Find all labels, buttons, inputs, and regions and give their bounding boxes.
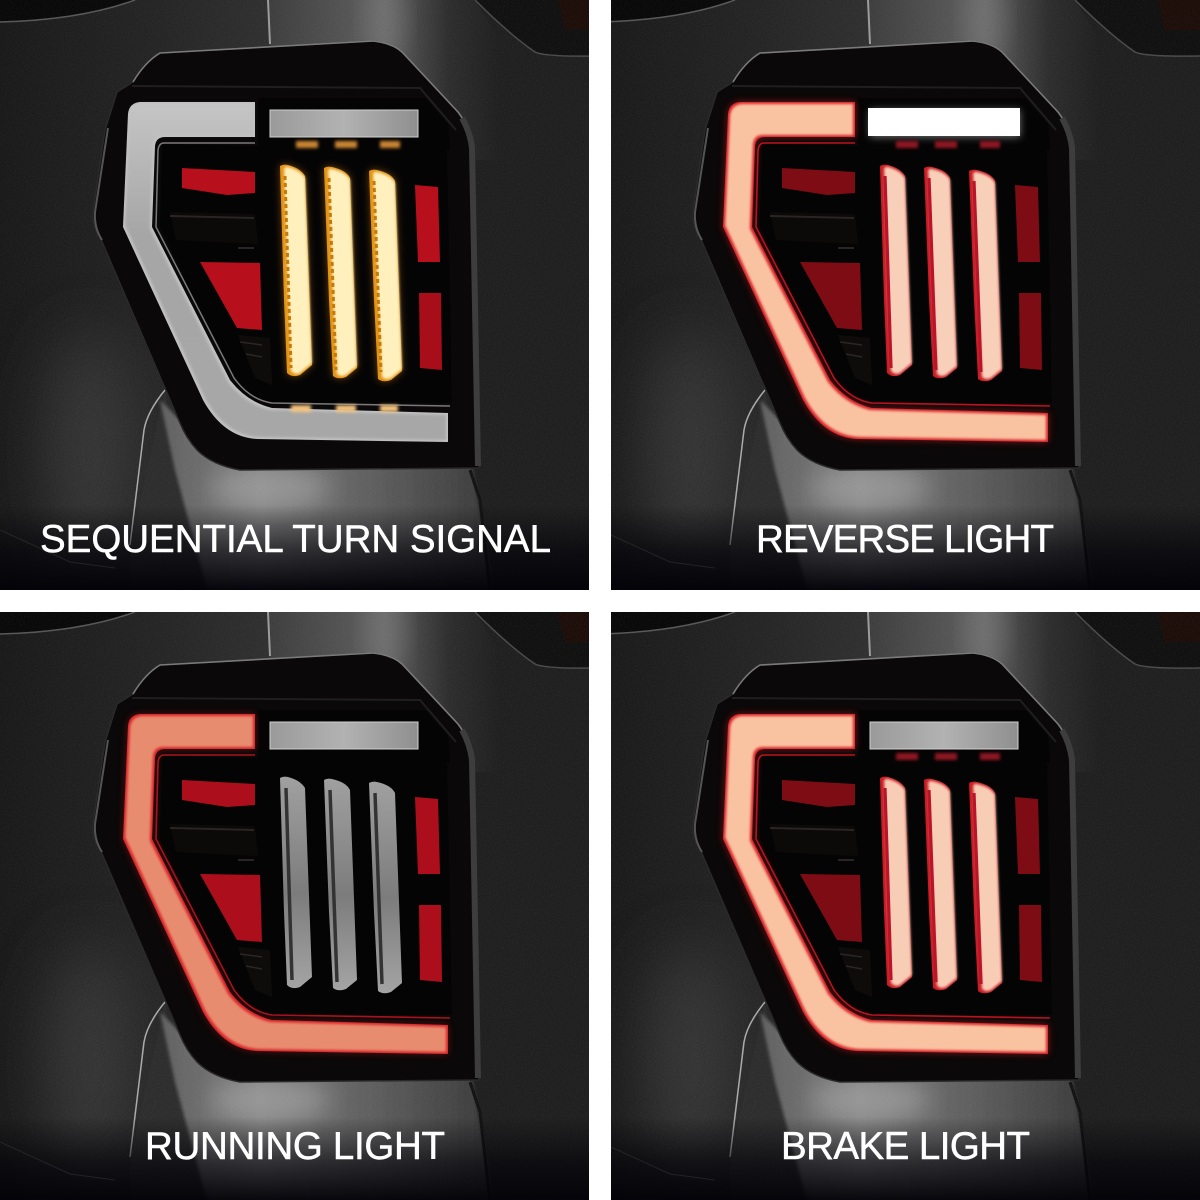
red reflections on the trim xyxy=(896,753,1000,760)
label: RUNNING LIGHT xyxy=(145,1125,445,1168)
bars: lit red xyxy=(880,165,1004,381)
label: BRAKE LIGHT xyxy=(781,1125,1030,1168)
red reflections on the trim xyxy=(896,141,1000,148)
panel: brake light xyxy=(600,587,1200,1200)
bars: unlit grey xyxy=(280,777,402,993)
bars: lit red xyxy=(880,777,1004,993)
red reflectors xyxy=(182,168,442,370)
tail lamp housing xyxy=(93,41,479,470)
panel: running light xyxy=(0,587,600,1200)
tail lamp housing xyxy=(693,653,1079,1082)
tube light: lit peach and red xyxy=(723,714,1050,1054)
red reflectors xyxy=(782,168,1042,370)
label: SEQUENTIAL TURN SIGNAL xyxy=(40,518,551,561)
tail lamp housing xyxy=(93,653,479,1082)
tube light: lit peach and red xyxy=(723,102,1050,442)
reverse lens: lit white xyxy=(868,108,1020,137)
amber reflections on the trim xyxy=(291,141,400,412)
turn signal bars: amber lit xyxy=(280,165,404,381)
reverse lens: off xyxy=(270,110,418,137)
reverse lens: off xyxy=(870,722,1018,749)
panel: sequential turn signal xyxy=(0,0,600,600)
tube light: unlit grey xyxy=(123,102,450,442)
tail lamp housing xyxy=(693,41,1079,470)
tube light: lit salmon and red xyxy=(123,714,450,1054)
label: REVERSE LIGHT xyxy=(756,518,1054,561)
panel: reverse light xyxy=(600,0,1200,600)
reverse lens: off xyxy=(270,722,418,749)
red reflectors xyxy=(182,780,442,982)
red reflectors xyxy=(782,780,1042,982)
